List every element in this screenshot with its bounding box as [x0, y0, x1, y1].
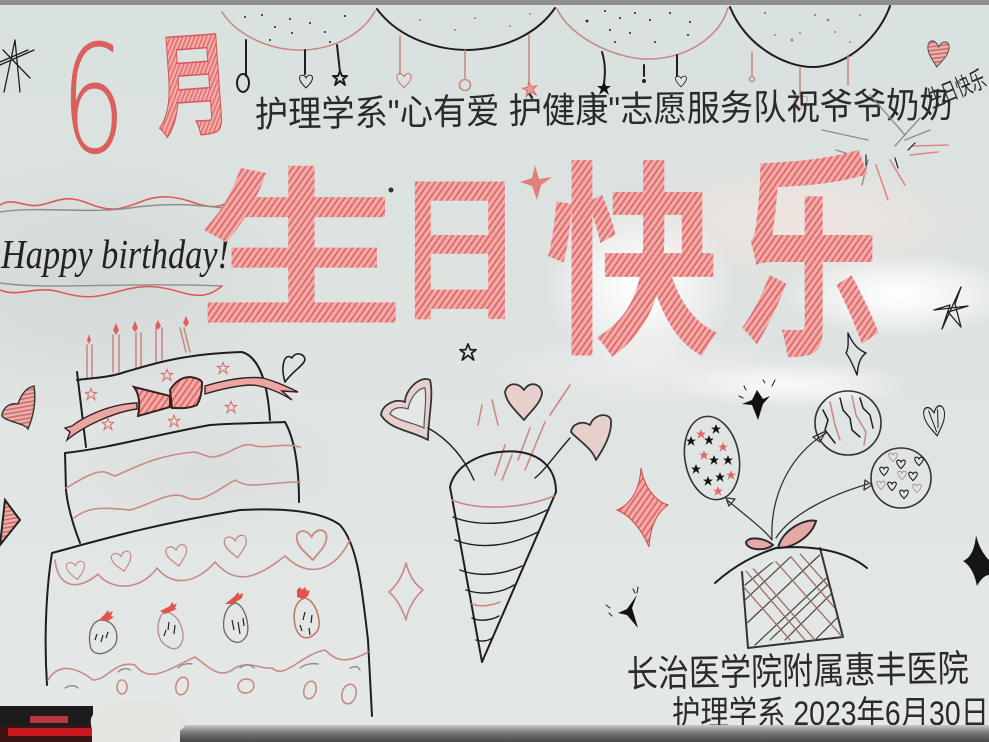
- bottom tier upper scallop: [55, 540, 350, 586]
- hearts: [381, 379, 431, 440]
- board tray: [180, 725, 989, 742]
- balloon: hearts: [871, 448, 931, 508]
- strawberries: [89, 587, 319, 654]
- top tier: [77, 352, 270, 447]
- diamond outline right: [846, 333, 866, 375]
- gift ribbon: [715, 547, 867, 583]
- heading: 6月: [61, 14, 236, 188]
- gift lattice: [742, 548, 845, 645]
- hearts on the left edge: [0, 386, 35, 545]
- subtitle line: 护理学系"心有爱 护健康"志愿服务队祝爷爷奶奶: [255, 84, 953, 135]
- heading: 6月: 6: [61, 14, 126, 188]
- middle tier: [65, 422, 299, 543]
- gift bow: [746, 521, 816, 549]
- candles: [87, 316, 190, 378]
- main title: 生日快乐: 日: [395, 163, 524, 341]
- heart beside cake: [283, 354, 305, 382]
- scallops: [222, 6, 890, 67]
- bottom tier dots: [65, 664, 360, 705]
- cone stripes: [452, 496, 554, 606]
- balloons and gift: [678, 391, 931, 648]
- black marker: [0, 706, 93, 726]
- banner text: Happy birthday!: [0, 231, 229, 277]
- balloon strings: [727, 433, 868, 540]
- board frame top: [0, 0, 989, 5]
- black diamond right: [963, 535, 989, 586]
- heart outline small right: [923, 405, 948, 437]
- balloon: waves: [815, 391, 881, 455]
- party popper: [381, 379, 611, 662]
- small black star outline: [460, 344, 476, 360]
- outline diamond: [389, 563, 423, 620]
- gift box: [742, 548, 843, 648]
- balloon: stars: [678, 412, 746, 504]
- markers and cloth: [0, 699, 187, 742]
- main title: 生日快乐: 生: [197, 157, 405, 349]
- marker label: [30, 716, 68, 723]
- red marker: [0, 726, 92, 742]
- streamers: [428, 428, 570, 480]
- banner: Happy birthday: [0, 197, 236, 297]
- middle tier waves: [66, 445, 300, 488]
- hanging strings and ornaments: [237, 35, 848, 109]
- bottom tier: [46, 509, 372, 716]
- scallop dots: [244, 10, 691, 43]
- star outline right: [934, 287, 968, 329]
- heading: 6月: 月: [151, 22, 236, 152]
- cone: [450, 451, 556, 662]
- red diamond: [617, 468, 668, 547]
- small black speck: [388, 188, 394, 192]
- banner wavy lines: [0, 197, 236, 209]
- bottom tier hearts: [66, 530, 328, 581]
- black star small: [606, 587, 638, 628]
- bunting with hanging ornaments: [222, 6, 890, 109]
- black star with ticks: [739, 380, 775, 420]
- ribbon and bow: [65, 377, 298, 440]
- bottom tier lower scallop: [48, 650, 368, 680]
- top tier stars: [85, 362, 237, 430]
- main title: 生日快乐: 快: [545, 150, 720, 382]
- small red star: [520, 165, 552, 200]
- birthday cake: [46, 316, 372, 716]
- fireworks: [822, 95, 948, 200]
- heart top right: [926, 40, 950, 68]
- main title: 生日快乐: [197, 137, 883, 386]
- cleaning cloth: [91, 699, 187, 742]
- main title: 生日快乐: 乐: [738, 137, 883, 386]
- star outline top left: [0, 40, 34, 92]
